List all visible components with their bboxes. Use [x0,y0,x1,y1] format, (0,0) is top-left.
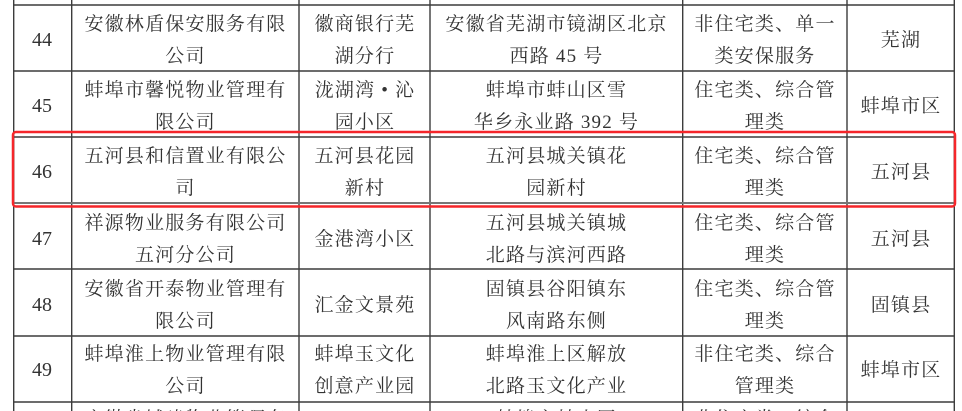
table row 44: 非住宅类、单一 [694,14,836,35]
table row 49: 公司 [165,376,206,397]
table row 47: 五河分公司 [135,245,236,266]
table row 49: 北路玉文化产业 [486,376,627,397]
table row 48: 48 [32,294,52,316]
table row 44: 安徽林盾保安服务有限 [84,14,286,35]
table row 45 [32,80,941,133]
table row 48 [32,278,931,332]
table row 49: 管理类 [735,376,795,397]
table row 44: 公司 [165,46,206,67]
table row 44: 西路 45 号 [510,46,603,67]
table row 47: 金港湾小区 [314,229,416,250]
table row 46 (highlighted) [32,146,931,199]
table row 49: 蚌埠淮上区解放 [486,344,627,365]
table row 48: 限公司 [155,311,216,332]
table row 46 (highlighted): 五河县 [871,162,931,183]
table row 46 (highlighted): 新村 [345,178,385,199]
table row 46 (highlighted): 理类 [745,178,785,199]
table row 44: 类安保服务 [714,46,816,67]
table row 49: 蚌埠淮上物业管理有限 [84,344,286,365]
table row 45: 限公司 [155,112,216,133]
table row 44: 安徽省芜湖市镜湖区北京 [445,14,668,35]
table row 49: 非住宅类、综合 [694,344,836,365]
table row 49 [32,344,941,397]
table row 49: 蚌埠玉文化 [314,344,416,365]
table row 46 (highlighted): 五河县和信置业有限公 [84,146,286,167]
table row 45: 理类 [745,112,785,133]
table row 48: 固镇县谷阳镇东 [486,279,627,300]
table row 50 (cropped) [84,408,836,411]
table row 46 (highlighted): 园新村 [526,178,587,199]
table row 48: 安徽省开泰物业管理有 [84,279,286,300]
table row 45: 蚌埠市蚌山区雪 [486,80,627,101]
table row 45: 蚌埠市区 [861,96,941,117]
table row 45: 华乡永业路 392 号 [474,112,639,133]
table row 44: 徽商银行芜 [314,14,416,35]
table row 48: 风南路东侧 [506,311,607,332]
table row 48: 固镇县 [871,295,931,316]
table row 48: 住宅类、综合管 [694,279,836,300]
table row 44: 芜湖 [881,30,921,51]
table row 47: 五河县 [871,229,931,250]
table row 49: 蚌埠市区 [861,360,941,381]
table row 46 (highlighted): 46 [32,161,52,183]
table row 47 [32,212,931,266]
table row 47: 五河县城关镇城 [486,213,627,234]
table row 48: 理类 [745,311,785,332]
table row 47: 理类 [745,245,785,266]
table row 45: 45 [32,95,52,117]
table row 46 (highlighted): 五河县花园 [314,146,416,167]
table row 45: 住宅类、综合管 [694,80,836,101]
table row 45: 泷湖湾 • 沁 [315,80,415,101]
table row 44 [32,14,921,67]
table row 46 (highlighted): 司 [175,178,196,199]
table row 44: 44 [32,29,52,51]
table row 47: 祥源物业服务有限公司 [84,213,286,234]
table row 49: 创意产业园 [314,376,416,397]
table row 45: 园小区 [335,112,395,133]
table row 48: 汇金文景苑 [314,295,416,316]
table row 45: 蚌埠市馨悦物业管理有 [84,80,286,101]
table row 49: 49 [32,359,52,381]
table row 47: 住宅类、综合管 [694,213,836,234]
table row 47: 北路与滨河西路 [486,245,627,266]
table row 46 (highlighted): 住宅类、综合管 [694,146,836,167]
table row 46 (highlighted): 五河县城关镇花 [486,146,627,167]
table row 47: 47 [32,228,52,250]
table row 44: 湖分行 [335,46,395,67]
